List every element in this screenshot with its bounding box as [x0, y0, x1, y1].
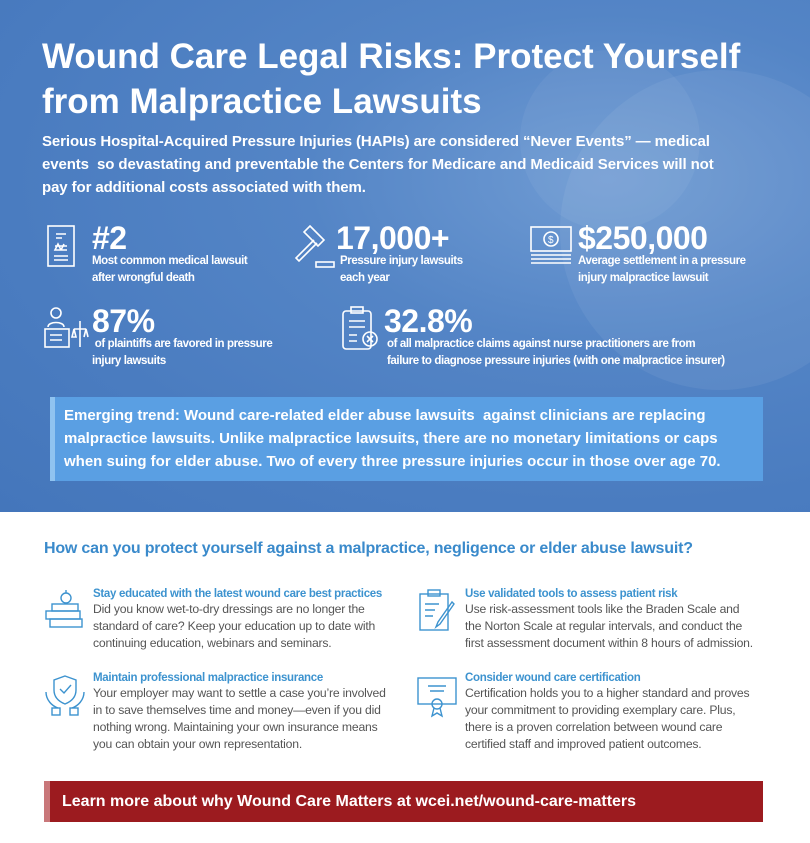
stat: 87%: injury lawsuits — [92, 355, 166, 367]
icon: gavel — [295, 225, 335, 268]
icon: legal document — [47, 225, 75, 267]
subtitle text: pay for additional costs associated with them. — [42, 179, 366, 196]
subtitle text: events so devastating and preventable the Centers for Medicare and Medicaid Services will not — [42, 156, 714, 173]
callout: emerging trend: Emerging trend: Wound care-related elder abuse lawsuits against clinicians are replacing — [64, 407, 706, 424]
stat: 87%: 87% — [92, 303, 155, 339]
tip: validated tools: the Norton Scale at regular intervals, and conduct the — [465, 619, 742, 633]
stat: 87%: of plaintiffs are favored in pressure — [95, 338, 272, 350]
hero background panel — [0, 0, 810, 512]
tip: validated tools — [419, 588, 753, 650]
stat: $250,000: injury malpractice lawsuit — [578, 272, 708, 284]
title: from Malpractice Lawsuits — [42, 82, 482, 121]
callout: emerging trend: when suing for elder abuse. Two of every three pressure injuries occur in those over age 70. — [64, 453, 721, 470]
tip: validated tools: Use risk-assessment tools like the Braden Scale and — [465, 602, 739, 616]
stat: 17,000+: each year — [340, 272, 389, 284]
icon: certificate — [417, 677, 457, 718]
tip: insurance: in to save themselves time and money—even if you did — [93, 703, 381, 717]
stat: #2: after wrongful death — [92, 272, 195, 284]
tip: certification: your commitment to providing exemplary care. Plus, — [465, 703, 735, 717]
stat: $250,000: $250,000 — [578, 220, 707, 256]
subtitle text: Serious Hospital-Acquired Pressure Injuries (HAPIs) are considered “Never Events” — medical — [42, 133, 710, 150]
tip: insurance: you can obtain your own representation. — [93, 737, 302, 751]
tip: validated tools: Use validated tools to assess patient risk — [465, 588, 677, 600]
icon: witness stand — [44, 307, 89, 348]
tip: insurance: nothing wrong. Maintaining your own insurance means — [93, 720, 378, 734]
title — [42, 37, 740, 121]
stat: 32.8%: failure to diagnose pressure injuries (with one malpractice insurer) — [387, 355, 725, 367]
callout: emerging trend: malpractice lawsuits. Unlike malpractice lawsuits, there are no monetary limitations or caps — [64, 430, 718, 447]
banner: learn more — [44, 781, 763, 822]
stat: #2 — [47, 220, 248, 284]
tip: certification: Certification holds you to a higher standard and proves — [465, 686, 749, 700]
section heading: How can you protect yourself against a malpractice, negligence or elder abuse lawsuit? — [44, 540, 693, 557]
stat: 17,000+ — [295, 220, 463, 284]
stat: 32.8% — [342, 303, 725, 367]
icon: money stack — [530, 226, 572, 264]
tip: insurance — [45, 672, 386, 751]
tip: stay educated: Did you know wet-to-dry dressings are no longer the — [93, 602, 365, 616]
tip: certification: Consider wound care certification — [465, 672, 640, 684]
stat: $250,000 — [530, 220, 746, 284]
tip: insurance: Your employer may want to settle a case you’re involved — [93, 686, 386, 700]
banner: learn more: Learn more about why Wound Care Matters at wcei.net/wound-care-matters — [62, 793, 636, 810]
stat: $250,000: Average settlement in a pressure — [578, 255, 746, 267]
tip: validated tools: first assessment document within 8 hours of admission. — [465, 636, 753, 650]
icon: money stack: $ — [548, 235, 554, 246]
stat: #2: #2 — [92, 220, 127, 256]
stat: 17,000+: Pressure injury lawsuits — [340, 255, 463, 267]
tip: stay educated: continuing education, webinars and seminars. — [93, 636, 332, 650]
title: Wound Care Legal Risks: Protect Yourself — [42, 37, 740, 76]
stat: 87% — [44, 303, 272, 367]
tip: certification: there is a proven correlation between wound care — [465, 720, 722, 734]
tip: certification: certified staff and improved patient outcomes. — [465, 737, 702, 751]
subtitle text — [42, 133, 714, 196]
tip: stay educated — [45, 588, 382, 650]
tip: certification — [417, 672, 750, 751]
tip: insurance: Maintain professional malpractice insurance — [93, 672, 323, 684]
stat: #2: Most common medical lawsuit — [92, 255, 247, 267]
callout: emerging trend — [50, 397, 763, 481]
icon: hands shield — [45, 675, 85, 716]
tip: stay educated: standard of care? Keep your education up to date with — [93, 619, 375, 633]
icon: clipboard pencil — [419, 589, 455, 631]
tip: stay educated: Stay educated with the latest wound care best practices — [93, 588, 382, 600]
stat: 32.8%: of all malpractice claims against nurse practitioners are from — [387, 338, 695, 350]
stat: 32.8%: 32.8% — [384, 303, 472, 339]
icon: books — [45, 590, 83, 628]
stat: 17,000+: 17,000+ — [336, 220, 449, 256]
icon: clipboard with x — [342, 306, 378, 350]
